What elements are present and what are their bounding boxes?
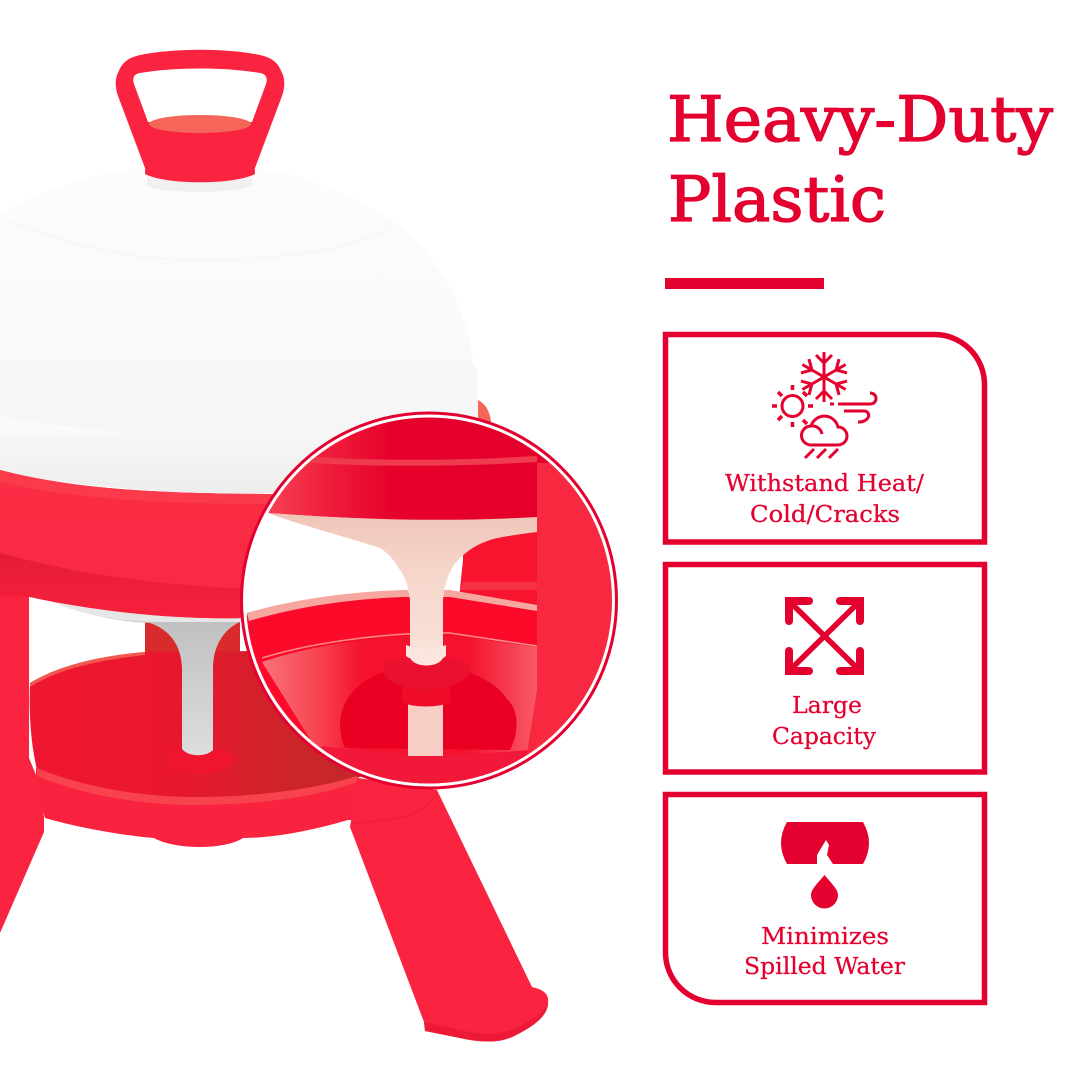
- panel: withstand heat/cold/cracks: [666, 334, 984, 542]
- magnified funnel stem: [268, 513, 537, 667]
- handle: [116, 50, 284, 168]
- panel border: [666, 794, 984, 1002]
- dome ridge: [8, 222, 390, 260]
- magnified washer neck: [402, 684, 450, 706]
- dome collar: [0, 400, 478, 493]
- icon: expand arrows: [789, 601, 860, 671]
- magnified stem collar: [406, 645, 446, 658]
- label line 2: Cold/Cracks: [750, 500, 900, 528]
- icon: cracked container: [781, 822, 869, 864]
- tray shadow band: [0, 553, 290, 618]
- cap neck shadow: [147, 176, 253, 192]
- wind: [830, 393, 876, 422]
- stem washer: [165, 748, 235, 774]
- tray highlight band: [300, 456, 537, 466]
- title: [667, 83, 1053, 236]
- product photo: poultry waterer: [0, 50, 548, 1042]
- label line 1: Withstand Heat/: [725, 469, 924, 497]
- tray rim highlight: [0, 470, 280, 504]
- label line 1: Minimizes: [761, 922, 889, 950]
- magnifier callout: [240, 410, 620, 800]
- title line 2: Plastic: [668, 163, 886, 236]
- magnified rear leg: [458, 532, 537, 608]
- panel: minimizes spilled water: [666, 794, 984, 1002]
- magnified pan: [246, 590, 537, 784]
- drinking pan: [30, 650, 360, 847]
- far rim tab: [478, 400, 491, 422]
- snowflake: [798, 352, 850, 402]
- backdrop: [240, 410, 620, 800]
- right leg: [350, 778, 548, 1042]
- magnified detail: [240, 410, 620, 800]
- panel border: [666, 564, 984, 772]
- sun: [772, 385, 813, 427]
- label line 1: Large: [792, 691, 862, 719]
- icon: water drop: [811, 875, 838, 908]
- panel: large capacity: [666, 564, 984, 772]
- magnified right leg: [526, 463, 612, 756]
- label line 2: Capacity: [772, 722, 877, 750]
- cloud: [802, 416, 847, 445]
- cap body: [145, 128, 255, 182]
- back leg: [145, 610, 240, 670]
- label line 2: Spilled Water: [744, 952, 906, 980]
- rain: [805, 449, 838, 458]
- cap lid: [149, 115, 251, 133]
- icon: weather: [772, 352, 876, 458]
- red tray: [0, 470, 300, 618]
- magnified lower stem: [408, 704, 443, 756]
- left leg top: [0, 597, 29, 640]
- magnifier ring: [242, 413, 616, 788]
- white dome: [0, 168, 478, 480]
- water stem: [48, 600, 250, 759]
- magnified washer: [383, 658, 471, 686]
- magnified tray: [268, 418, 594, 520]
- left leg: [0, 555, 44, 933]
- title line 1: Heavy-Duty: [667, 83, 1053, 156]
- title rule: [665, 278, 824, 289]
- panel border: [666, 334, 984, 542]
